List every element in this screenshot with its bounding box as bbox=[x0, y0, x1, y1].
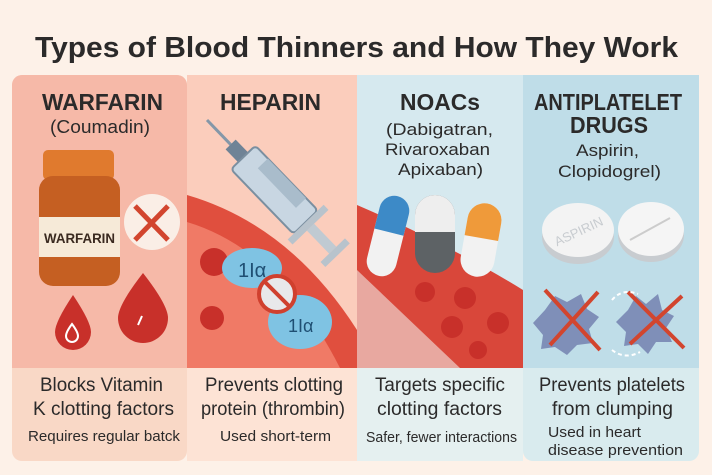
heading: warfarin: WARFARIN bbox=[42, 89, 163, 115]
icon: thrombin blob bbox=[222, 248, 332, 349]
icon: thrombin blob: 1Iα bbox=[288, 316, 313, 336]
icon: blood drops bbox=[55, 273, 168, 350]
heading: noacs: (Dabigatran, bbox=[386, 120, 493, 139]
text: noacs description: Targets specific bbox=[375, 375, 505, 396]
title: Types of Blood Thinners and How They Work bbox=[35, 32, 679, 64]
icon: pill bottle bbox=[39, 150, 120, 286]
panel: heparin bbox=[187, 75, 357, 461]
blood vessel bbox=[357, 205, 523, 368]
text: noacs description bbox=[366, 375, 517, 446]
heading: noacs: Apixaban) bbox=[398, 160, 483, 179]
text: heparin description bbox=[201, 375, 345, 445]
heading: antiplatelet: DRUGS bbox=[570, 112, 648, 138]
text: antiplatelet description: from clumping bbox=[552, 399, 673, 420]
text: heparin description: protein (thrombin) bbox=[201, 399, 345, 420]
text: warfarin description: Requires regular batck bbox=[28, 428, 180, 445]
heading: antiplatelet: ANTIPLATELET bbox=[534, 89, 682, 115]
text: antiplatelet description: Used in heart bbox=[548, 424, 642, 441]
text: heparin description: Used short-term bbox=[220, 428, 331, 445]
panel: antiplatelet bbox=[523, 75, 699, 461]
heading: antiplatelet bbox=[534, 89, 682, 181]
heading: heparin: HEPARIN bbox=[220, 89, 321, 115]
heading: noacs: NOACs bbox=[400, 89, 480, 115]
blood vessel bbox=[187, 195, 357, 368]
text: antiplatelet description: disease prevention bbox=[548, 442, 683, 459]
panel: noacs bbox=[357, 75, 523, 461]
panel: warfarin bbox=[12, 75, 187, 461]
heading: antiplatelet: Clopidogrel) bbox=[558, 162, 661, 181]
heading: antiplatelet: Aspirin, bbox=[576, 141, 639, 160]
text: warfarin description: K clotting factors bbox=[33, 399, 174, 420]
panel: warfarin: (Coumadin) bbox=[50, 117, 150, 137]
heading: noacs: Rivaroxaban bbox=[385, 140, 490, 159]
text: warfarin description: Blocks Vitamin bbox=[40, 375, 163, 396]
icon: aspirin tablets bbox=[542, 202, 684, 264]
text: antiplatelet description: Prevents platelets bbox=[539, 375, 685, 396]
icon: crossed platelets bbox=[533, 290, 684, 356]
text: heparin description: Prevents clotting bbox=[205, 375, 343, 396]
icon: crossed factor bbox=[124, 194, 180, 250]
icon: capsules bbox=[364, 193, 504, 279]
icon: aspirin tablets: ASPIRIN bbox=[552, 214, 605, 249]
text: antiplatelet description bbox=[539, 375, 685, 459]
icon: syringe bbox=[189, 103, 356, 273]
heading: noacs bbox=[385, 89, 493, 179]
text: noacs description: clotting factors bbox=[377, 399, 502, 420]
text: noacs description: Safer, fewer interactions bbox=[366, 429, 517, 446]
icon: thrombin blob: 1Iα bbox=[238, 260, 266, 282]
text: warfarin description bbox=[28, 375, 180, 445]
icon: pill bottle: WARFARIN bbox=[44, 230, 115, 246]
